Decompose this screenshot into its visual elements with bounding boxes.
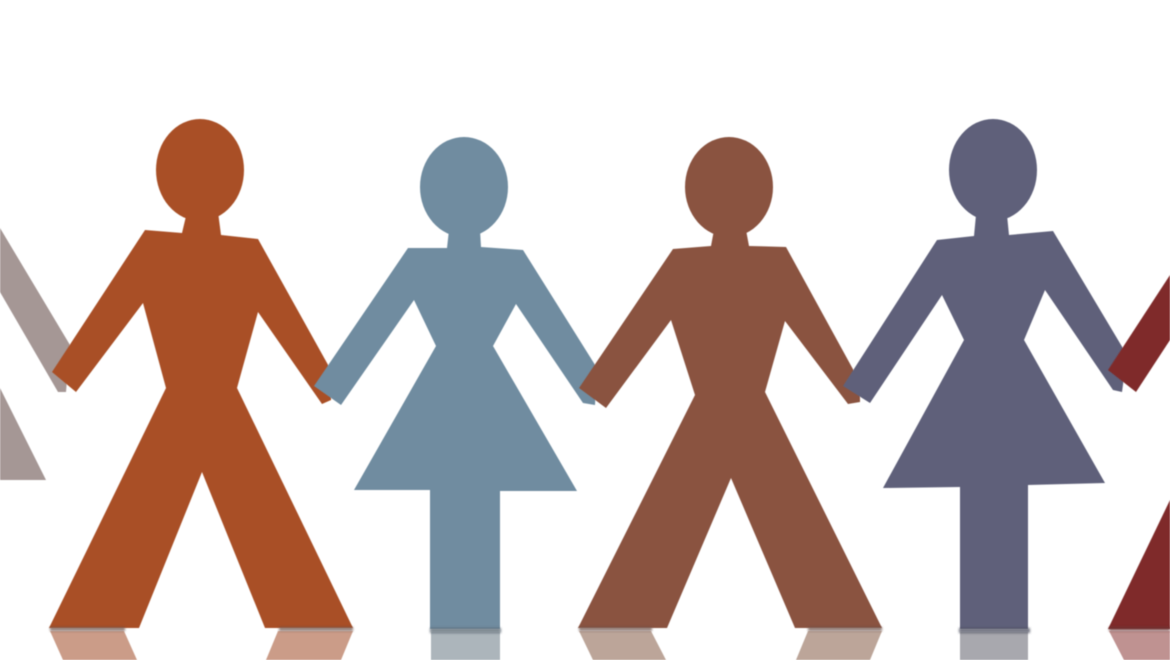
figure: slate woman bbox=[843, 119, 1127, 629]
figure: partial dark red figure at right edge bbox=[1108, 275, 1170, 629]
reflection: orange man feet bbox=[50, 631, 353, 660]
figure: blue woman bbox=[314, 137, 597, 629]
figure: partial grey figure at left edge bbox=[0, 228, 70, 480]
reflection: dark red figure bbox=[1109, 631, 1170, 660]
reflection: slate woman leg bbox=[960, 632, 1028, 660]
reflection: blue woman leg bbox=[431, 632, 500, 660]
figure: orange man bbox=[49, 119, 353, 628]
contact shadows under feet bbox=[50, 627, 1170, 633]
figure: brown man bbox=[578, 137, 882, 628]
reflection: brown man feet bbox=[579, 631, 882, 660]
